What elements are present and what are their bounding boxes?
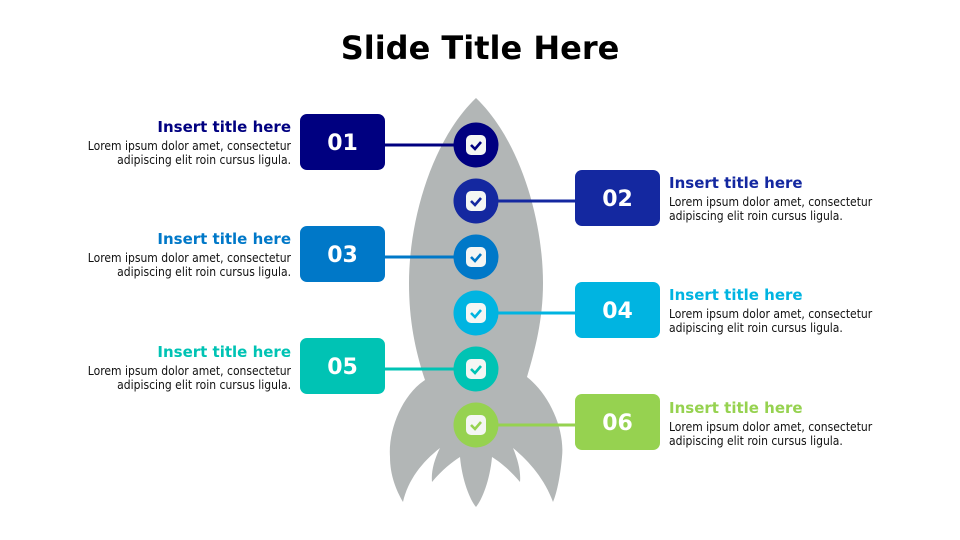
text 05: Lorem ipsum dolor amet, consectetur xyxy=(88,364,291,378)
text 03: Insert title here xyxy=(157,230,291,248)
text 04: Insert title here xyxy=(669,286,803,304)
title: Slide Title Here xyxy=(341,29,619,67)
box 05: 05 xyxy=(327,355,358,380)
text 01: Insert title here xyxy=(157,118,291,136)
text 03: adipiscing elit roin cursus ligula. xyxy=(117,265,291,279)
text 02: Lorem ipsum dolor amet, consectetur xyxy=(669,195,872,209)
box 02 xyxy=(575,170,660,226)
text 01 xyxy=(88,118,291,167)
box 04 xyxy=(575,282,660,338)
box 02: 02 xyxy=(602,187,633,212)
text 03 xyxy=(88,230,291,279)
text 04 xyxy=(669,286,872,335)
box 06 xyxy=(575,394,660,450)
connectors xyxy=(385,145,575,425)
box 03: 03 xyxy=(327,243,358,268)
box 04: 04 xyxy=(602,299,633,324)
check icons xyxy=(454,122,498,448)
text 04: Lorem ipsum dolor amet, consectetur xyxy=(669,307,872,321)
text 05: Insert title here xyxy=(157,343,291,361)
text 02: Insert title here xyxy=(669,174,803,192)
box 03 xyxy=(300,226,385,282)
text 06: adipiscing elit roin cursus ligula. xyxy=(669,434,843,448)
text 06: Insert title here xyxy=(669,399,803,417)
box 05 xyxy=(300,338,385,394)
rocket body xyxy=(390,98,562,507)
box 06: 06 xyxy=(602,411,633,436)
text 06: Lorem ipsum dolor amet, consectetur xyxy=(669,420,872,434)
text 06 xyxy=(669,399,872,448)
text 03: Lorem ipsum dolor amet, consectetur xyxy=(88,251,291,265)
box 01 xyxy=(300,114,385,170)
text 05 xyxy=(88,343,291,392)
text 01: adipiscing elit roin cursus ligula. xyxy=(117,153,291,167)
text 04: adipiscing elit roin cursus ligula. xyxy=(669,321,843,335)
text 05: adipiscing elit roin cursus ligula. xyxy=(117,378,291,392)
text 02: adipiscing elit roin cursus ligula. xyxy=(669,209,843,223)
text 02 xyxy=(669,174,872,223)
text 01: Lorem ipsum dolor amet, consectetur xyxy=(88,139,291,153)
box 01: 01 xyxy=(327,131,358,156)
